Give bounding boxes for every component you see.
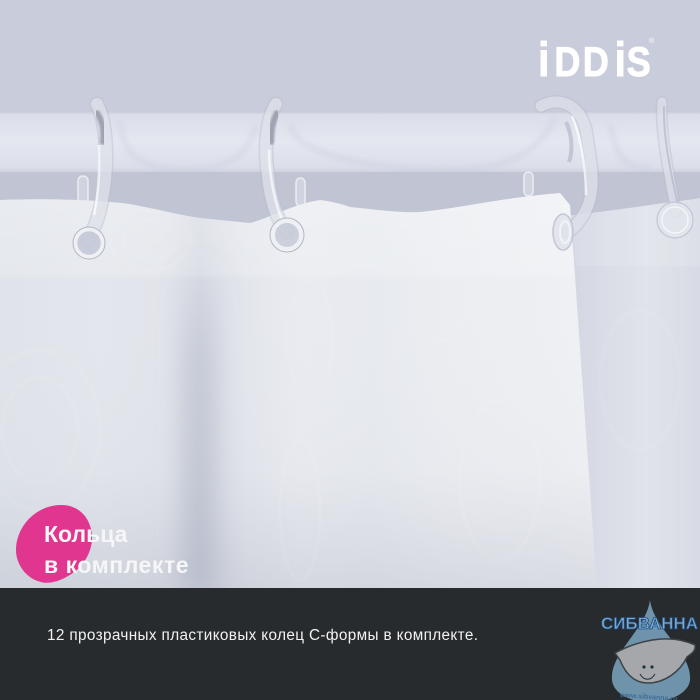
shower curtain rod [0,111,700,172]
badge heading: Кольца [44,521,128,547]
back panel hem [572,198,700,266]
curtain back panel (right) [566,198,700,590]
logo: iddis: ® [649,37,655,45]
dark footer bar [0,588,700,700]
bathtub [615,639,695,683]
watermark logo: Сибванна [601,600,698,700]
ring 3 [541,102,592,250]
tub face [640,665,655,679]
pink badge blob [16,505,92,583]
ring 4 [657,102,693,238]
badge heading: в комплекте [44,552,189,578]
footer description: 12 прозрачных пластиковых колец С-формы в комплекте. [47,627,478,644]
curtain hook tabs [78,172,533,208]
water drop [612,600,690,700]
curtain jacquard pattern [0,210,680,580]
brand name: СИБВАННА [601,615,698,633]
ring 1 [73,104,106,259]
logo: iddis: iDDiS [538,33,651,87]
ring 2 [266,104,304,252]
curtain front panel [0,193,680,590]
shadow band below the rod [0,172,700,232]
